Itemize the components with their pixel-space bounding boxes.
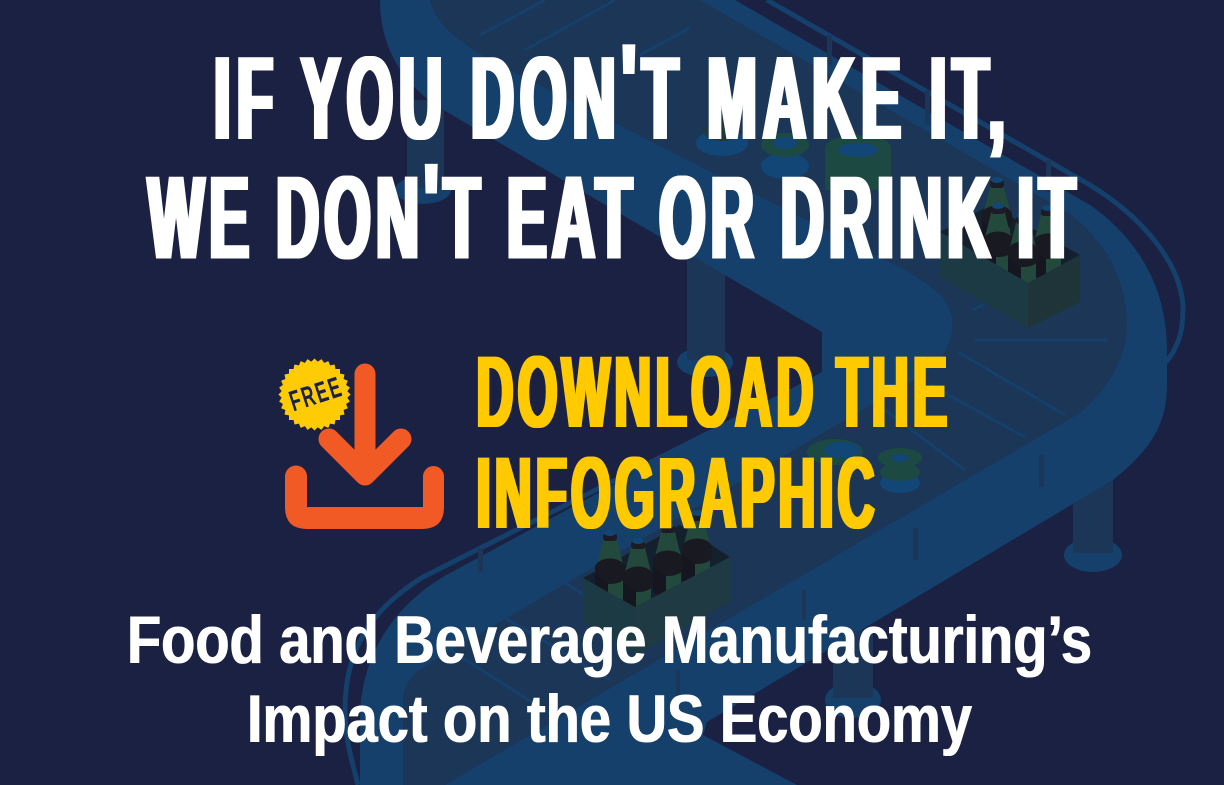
conveyor belt cross lines (450, 0, 1107, 760)
icon: download tray (285, 466, 444, 529)
download heading (476, 336, 947, 551)
subtitle line 2: Impact on the US Economy (247, 681, 972, 757)
download line 1: DOWNLOAD THE (476, 336, 947, 450)
conveyor side band (360, 0, 1167, 785)
conveyor rail posts (478, 35, 1051, 700)
title line 1: T (642, 31, 678, 164)
title line 1: IF YOU DON (214, 31, 616, 164)
title line 2: EAT OR DRINK IT (507, 151, 1076, 284)
title line 2: T (444, 151, 480, 284)
title line 2: WE DON (148, 151, 419, 284)
conveyor belt surface (403, 0, 1127, 785)
icon: lower bottle crate (583, 510, 730, 655)
subtitle (127, 602, 1092, 757)
title line 1: MAKE IT, (707, 31, 1005, 164)
title line 1: ' (622, 18, 636, 151)
badge: free: FREE (285, 371, 345, 418)
icon: upper bottle crate (940, 177, 1080, 328)
conveyor support legs (395, 100, 1122, 718)
icon: cans on lower belt (807, 439, 922, 493)
icon: download arrow (329, 374, 401, 475)
icon: download arrow with free badge (278, 358, 444, 529)
background illustration: conveyor belt (345, 0, 1183, 785)
title (148, 18, 1076, 284)
icon: cans on upper belt (696, 123, 891, 190)
title line 2: ' (424, 138, 438, 271)
conveyor outer rail (345, 0, 1183, 785)
badge: free (278, 358, 351, 431)
download line 2: INFOGRAPHIC (476, 437, 875, 551)
